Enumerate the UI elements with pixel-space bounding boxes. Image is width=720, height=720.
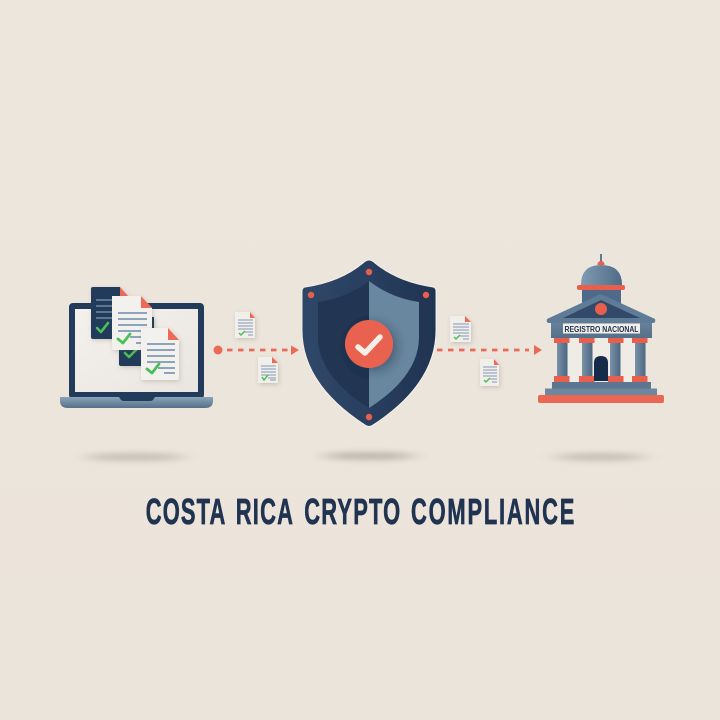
drum (582, 290, 621, 304)
title: COSTA (146, 492, 226, 532)
shield inner right (369, 281, 419, 408)
columns (554, 338, 648, 382)
dome (581, 265, 622, 285)
icon: shield (302, 260, 436, 426)
white document two (141, 328, 179, 380)
laptop base (60, 397, 213, 408)
door (594, 356, 608, 381)
dark document middle (119, 317, 154, 366)
title: CRYPTO (304, 492, 401, 532)
entablature (551, 323, 652, 338)
icon: government building (538, 254, 664, 403)
ground shadows (85, 452, 646, 461)
small document upper left (235, 312, 255, 338)
arrow: shield to registry (437, 345, 542, 355)
shield outer (302, 260, 436, 426)
arrow: laptop to shield (214, 346, 299, 355)
colonnade wall (566, 338, 636, 382)
pediment (547, 294, 655, 323)
steps (538, 382, 664, 403)
rivets (308, 269, 429, 420)
check badge (345, 320, 393, 368)
sign: REGISTRO NACIONAL (564, 324, 638, 334)
icon: laptop with documents (60, 287, 213, 408)
title: RICA (236, 492, 294, 532)
white document one (112, 296, 152, 350)
dark document back (91, 287, 128, 339)
small document upper right (450, 316, 471, 342)
small document lower left (258, 357, 278, 383)
laptop lid (69, 303, 204, 399)
title: COMPLIANCE (411, 492, 576, 532)
shield inner left (318, 281, 369, 408)
spire (598, 254, 604, 265)
dome band (577, 285, 625, 290)
small document lower right (480, 359, 499, 386)
